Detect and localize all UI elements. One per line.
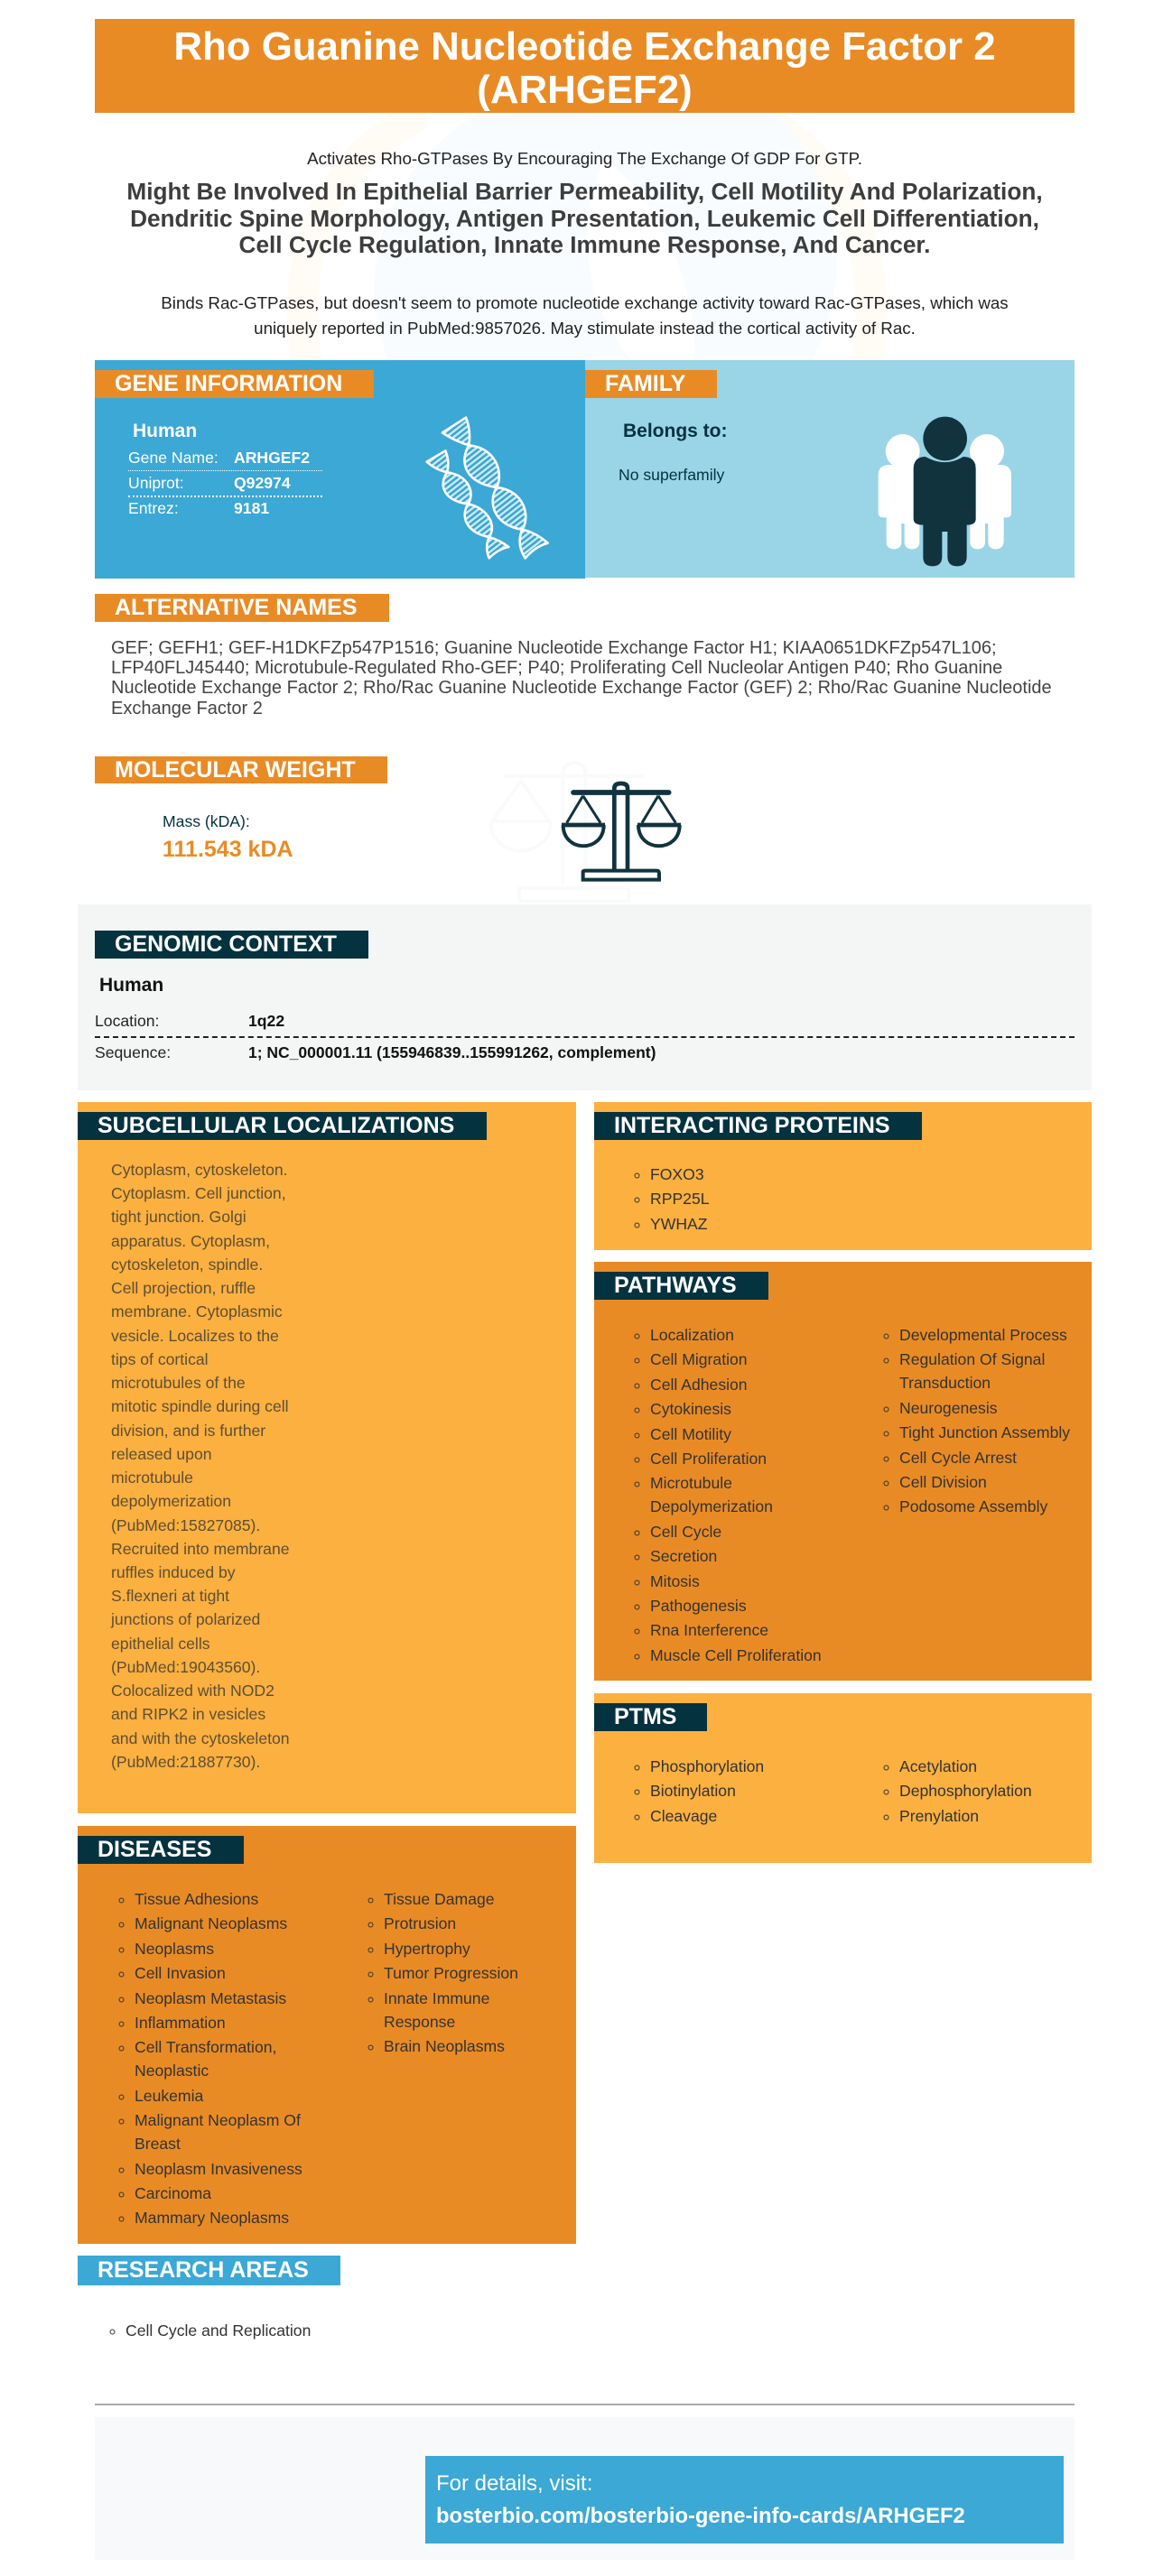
alternative names text [111,638,1052,718]
pathways list column 1: Cell Proliferation [650,1450,767,1468]
sequence row [95,1043,656,1061]
watermark: faint background logo [287,113,887,360]
localization text: (PubMed:19043560). [111,1658,260,1676]
protein list [634,1165,710,1233]
pathways list column 1: Secretion [650,1547,717,1565]
panel: genomic context: 1q22 [248,1012,284,1030]
pathways list column 2: Podosome Assembly [899,1497,1047,1515]
localization text: released upon [111,1445,212,1463]
gene name row: Gene Name: [128,449,219,467]
diseases list column 2: Protrusion [384,1914,456,1932]
panel: gene information [95,360,585,579]
entrez row: 9181 [234,499,269,517]
panel: genomic context: 1; NC_000001.11 (155946839..155991262, complement) [248,1043,656,1061]
pathways list column 1: Microtubule [650,1474,732,1492]
localization text: microtubules of the [111,1374,246,1392]
localization text: Cytoplasm, cytoskeleton. [111,1161,288,1179]
heading: molecular weight: MOLECULAR WEIGHT [115,757,356,783]
location row [95,1012,284,1030]
pathways list column 1: Muscle Cell Proliferation [650,1646,822,1664]
PTM list column 2 [883,1757,1032,1825]
localization text: epithelial cells [111,1635,210,1653]
pathways list column 2: Regulation Of Signal [899,1350,1045,1368]
diseases list column 1: Tissue Adhesions [135,1890,258,1908]
diseases list column 1: Mammary Neoplasms [135,2209,289,2227]
dashed divider [95,1036,1075,1038]
title banner: (ARHGEF2) [477,68,693,112]
protein list: FOXO3 [650,1165,704,1183]
diseases list column 1 [119,1890,302,2227]
summary sentence: Activates Rho-GTPases By Encouraging The Exchange Of GDP For GTP. [307,149,862,168]
footer divider [95,2404,1075,2405]
pathways list column 2: Cell Division [899,1473,987,1491]
callout: details link [425,2456,1064,2544]
panel: subcellular localizations [78,1102,576,1813]
PTM list column 1: Cleavage [650,1807,717,1825]
heading: alternative names: ALTERNATIVE NAMES [115,595,358,620]
localization text: membrane. Cytoplasmic [111,1302,283,1320]
localization text: and with the cytoskeleton [111,1729,290,1747]
uniprot row [128,471,322,497]
pathways list column 1: Pathogenesis [650,1597,747,1615]
panel: family [585,360,1075,578]
heading: family [585,370,717,398]
mass label: Mass (kDA): [163,812,250,830]
diseases list column 1: Neoplasm Metastasis [135,1989,286,2007]
localization text: ruffles induced by [111,1563,236,1581]
diseases list column 2: Tumor Progression [384,1964,518,1982]
protein list: RPP25L [650,1190,710,1208]
diseases list column 2 [368,1890,518,2055]
localization text: (PubMed:15827085). [111,1516,260,1534]
localization text: junctions of polarized [111,1610,260,1628]
gene name row: ARHGEF2 [234,449,310,467]
pathways list column 1: Cytokinesis [650,1400,731,1418]
diseases list column 1: Neoplasms [135,1940,214,1958]
PTM list column 1: Biotinylation [650,1782,736,1800]
location row: Location: [95,1012,159,1030]
diseases list column 1: Neoplastic [135,2062,209,2080]
title banner: Rho Guanine Nucleotide Exchange Factor 2 [173,24,996,69]
localization text: microtubule [111,1469,193,1487]
PTM list column 1: Phosphorylation [650,1757,764,1775]
icon: DNA helices [425,416,549,560]
pathways list column 1: Cell Adhesion [650,1376,748,1394]
heading: research areas: RESEARCH AREAS [98,2257,309,2283]
heading: diseases [78,1836,244,1864]
icon: balance scale [562,782,682,882]
diseases list column 1: Neoplasm Invasiveness [135,2160,302,2178]
diseases list column 2: Hypertrophy [384,1940,470,1958]
mass value: 111.543 kDA [163,837,293,862]
description text: Binds Rac-GTPases, but doesn't seem to promote nucleotide exchange activity toward Rac-GTPases, which was [161,293,1009,312]
diseases list column 1: Leukemia [135,2087,203,2105]
localization text: and RIPK2 in vesicles [111,1705,265,1723]
bold function summary: Cell Cycle Regulation, Innate Immune Response, And Cancer. [239,231,930,258]
pathways list column 1: Depolymerization [650,1497,773,1515]
heading: pathways [594,1272,768,1300]
icon: faint scale watermark [479,758,695,912]
title banner [95,19,1075,113]
localization text: depolymerization [111,1492,231,1510]
diseases list column 1: Inflammation [135,2014,226,2032]
localization text: Colocalized with NOD2 [111,1682,274,1700]
diseases list column 1: Cell Invasion [135,1964,226,1982]
pathways list column 1: Cell Cycle [650,1523,721,1541]
callout label: For details, visit: [436,2471,592,2496]
PTM list column 2: Dephosphorylation [899,1782,1032,1800]
alternative names text: Exchange Factor 2 [111,699,263,718]
localization text: mitotic spindle during cell [111,1397,289,1415]
belongs to label: Belongs to: [623,421,728,441]
pathways list column 2: Transduction [899,1374,991,1392]
localization text: Cytoplasm. Cell junction, [111,1184,286,1202]
diseases list column 1: Malignant Neoplasm Of [135,2111,301,2129]
localization text: tips of cortical [111,1350,209,1368]
diseases list column 2: Tissue Damage [384,1890,495,1908]
protein list: YWHAZ [650,1215,708,1233]
bold function summary: Might Be Involved In Epithelial Barrier Permeability, Cell Motility And Polarization, [126,178,1043,205]
localization text: (PubMed:21887730). [111,1753,260,1771]
pathways list column 1: Localization [650,1326,734,1344]
entrez row [128,499,269,517]
panel: pathways [594,1262,1092,1681]
uniprot row: Q92974 [234,474,291,492]
pathways list column 2: Cell Cycle Arrest [899,1449,1017,1467]
pathways list column 1 [634,1326,822,1664]
localization text: cytoskeleton, spindle. [111,1256,263,1274]
icon: group of people [878,417,1011,567]
diseases list column 1: Carcinoma [135,2184,211,2202]
bold function summary [126,178,1043,258]
PTM list column 2: Prenylation [899,1807,979,1825]
alternative names text: Nucleotide Exchange Factor 2; Rho/Rac Guanine Nucleotide Exchange Factor (GEF) 2; Rho/Rac Guanine Nucleotide [111,678,1052,698]
research areas list: Cell Cycle and Replication [126,2321,311,2340]
diseases list column 2: Brain Neoplasms [384,2037,505,2055]
diseases list column 2: Response [384,2013,455,2031]
PTM list column 2: Acetylation [899,1757,977,1775]
description text [161,293,1009,338]
diseases list column 1: Cell Transformation, [135,2038,276,2056]
alternative names text: LFP40FLJ45440; Microtubule-Regulated Rho-GEF; P40; Proliferating Cell Nucleolar Antigen P40; Rho Guanine [111,658,1002,678]
pathways list column 1: Cell Migration [650,1350,748,1368]
heading: pathways: PATHWAYS [614,1273,737,1298]
alternative names text: GEF; GEFH1; GEF-H1DKFZp547P1516; Guanine Nucleotide Exchange Factor H1; KIAA0651DKFZp547L106; [111,638,997,658]
diseases list column 1: Breast [135,2135,181,2153]
diseases list column 2: Innate Immune [384,1989,489,2007]
pathways list column 2: Neurogenesis [899,1399,998,1417]
localization text: Recruited into membrane [111,1540,290,1558]
localization text [110,1161,290,1771]
localization text: apparatus. Cytoplasm, [111,1232,270,1250]
callout url: bosterbio.com/bosterbio-gene-info-cards/ARHGEF2 [436,2504,965,2528]
localization text: Cell projection, ruffle [111,1279,256,1297]
species label: Human [99,975,163,996]
species label: Human [133,421,197,441]
heading: genomic context: GENOMIC CONTEXT [115,931,337,957]
heading: family: FAMILY [605,371,685,396]
heading: research areas [78,2256,340,2285]
panel: interacting proteins [594,1102,1092,1250]
heading: interacting proteins: INTERACTING PROTEINS [614,1113,890,1138]
localization text: division, and is further [111,1422,265,1440]
heading: PTMs: PTMS [614,1704,676,1729]
bold function summary: Dendritic Spine Morphology, Antigen Presentation, Leukemic Cell Differentiation, [130,204,1039,231]
pathways list column 2: Developmental Process [899,1326,1067,1344]
panel: diseases [78,1826,576,2244]
heading: PTMs [594,1703,707,1731]
description text: uniquely reported in PubMed:9857026. May stimulate instead the cortical activity of Rac. [254,319,916,338]
localization text: tight junction. Golgi [111,1208,247,1226]
pathways list column 1: Cell Motility [650,1425,731,1443]
pathways list column 2 [883,1326,1070,1515]
family value: No superfamily [619,466,724,484]
PTM list column 1 [634,1757,764,1825]
pathways list column 1: Rna Interference [650,1621,768,1639]
gene name row [128,446,322,471]
sequence row: Sequence: [95,1043,171,1061]
heading: gene information: GENE INFORMATION [115,371,342,396]
localization text: vesicle. Localizes to the [111,1327,279,1345]
panel: genomic context [78,904,1092,1090]
localization text: S.flexneri at tight [111,1587,229,1605]
panel: footer [95,2417,1075,2560]
pathways list column 1: Mitosis [650,1572,700,1590]
entrez row: Entrez: [128,499,179,517]
panel: PTMs [594,1693,1092,1863]
diseases list column 1: Malignant Neoplasms [135,1914,287,1932]
uniprot row: Uniprot: [128,474,184,492]
heading: subcellular localizations: SUBCELLULAR LOCALIZATIONS [98,1113,454,1138]
pathways list column 2: Tight Junction Assembly [899,1423,1070,1441]
heading: diseases: DISEASES [98,1837,211,1862]
